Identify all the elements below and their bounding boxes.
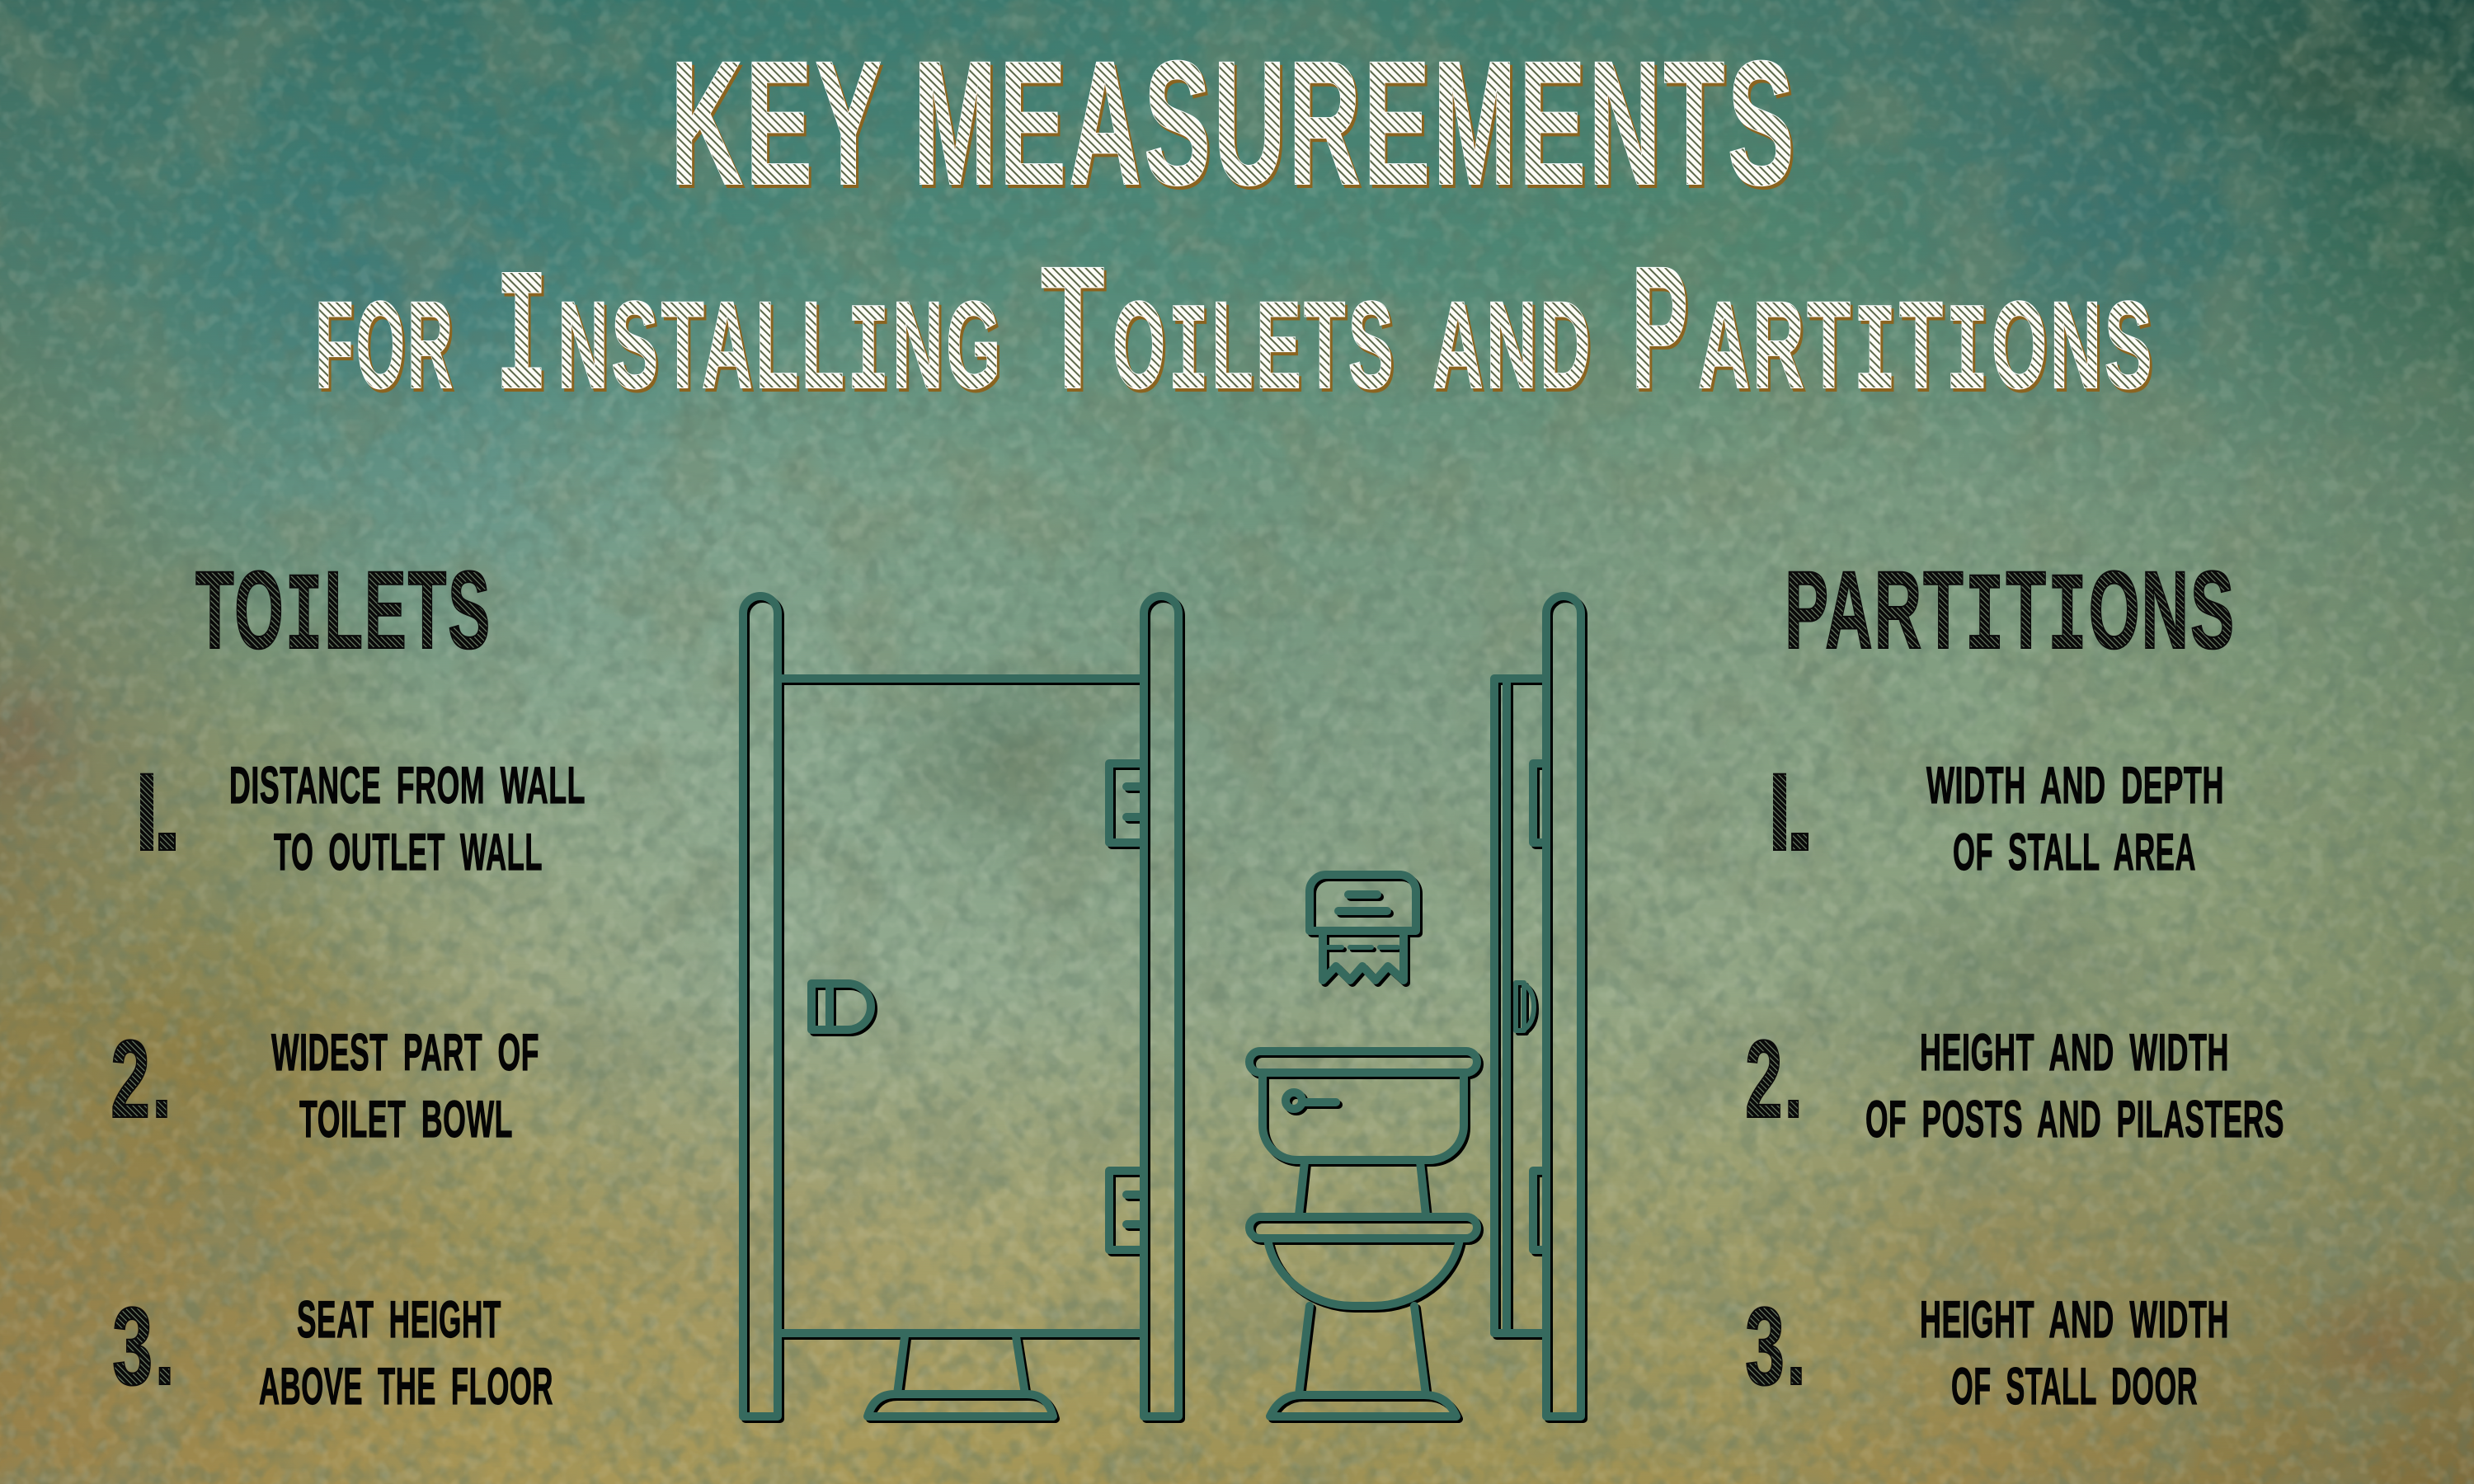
number 1: . xyxy=(1785,751,1818,874)
title line 2: NSTALLING xyxy=(557,275,1004,425)
illustration: stall and toilet xyxy=(743,596,1581,1416)
partition item 3: HEIGHT AND WIDTH xyxy=(1920,1291,2229,1349)
door edge xyxy=(1494,679,1546,1333)
number 2: 2. xyxy=(111,1018,173,1141)
panel: toilets list xyxy=(107,549,586,1416)
panel: partitions list xyxy=(1740,549,2284,1416)
number 1: 1 xyxy=(1740,751,1814,874)
number 2: 2. xyxy=(1745,1018,1804,1141)
lower hinge xyxy=(1109,1171,1144,1250)
stall front view xyxy=(743,596,1178,1416)
upper hinge xyxy=(1109,763,1144,843)
partition item 3: OF STALL DOOR xyxy=(1951,1358,2198,1416)
number 1: . xyxy=(152,751,185,874)
heading: toilets: TOILETS xyxy=(195,549,492,682)
side hinges xyxy=(1533,763,1546,1250)
door latch xyxy=(811,984,871,1030)
tank neck xyxy=(1299,1162,1426,1215)
toilet item 1: DISTANCE FROM WALL xyxy=(229,757,586,815)
title line 2: OILETS xyxy=(1112,275,1396,425)
number 1 xyxy=(1773,773,1808,851)
pilaster foot xyxy=(868,1336,1053,1416)
title line 2: FOR xyxy=(315,275,455,414)
toilet item 1 xyxy=(229,757,586,881)
tank lid xyxy=(1249,1051,1477,1073)
stall side view xyxy=(1494,596,1581,1416)
heading: partitions: PARTITIONS xyxy=(1785,549,2236,682)
partition item 1: WIDTH AND DEPTH xyxy=(1926,757,2224,815)
title line 2 xyxy=(315,230,2155,440)
title line 2: P xyxy=(1631,230,1691,425)
number 1 xyxy=(140,773,176,851)
title line 2: ARTITIONS xyxy=(1698,275,2155,425)
bowl xyxy=(1268,1239,1460,1306)
stall door xyxy=(778,679,1144,1333)
partition item 3 xyxy=(1920,1291,2229,1416)
number 1: 1 xyxy=(107,751,181,874)
flush handle xyxy=(1286,1092,1302,1109)
side post xyxy=(1546,596,1581,1416)
title line 2: T xyxy=(1041,230,1108,425)
toilet item 3: ABOVE THE FLOOR xyxy=(259,1358,553,1416)
toilet item 3 xyxy=(259,1291,553,1416)
toilet item 2: WIDEST PART OF xyxy=(271,1024,539,1082)
partition item 1 xyxy=(1926,757,2224,881)
tank xyxy=(1263,1073,1464,1160)
toilet item 3: SEAT HEIGHT xyxy=(297,1291,501,1349)
title line 2: I xyxy=(496,243,550,440)
number 3: 3. xyxy=(1745,1285,1808,1408)
side latch xyxy=(1516,983,1534,1031)
toilet base xyxy=(1270,1306,1456,1416)
toilet item 2: TOILET BOWL xyxy=(299,1091,513,1148)
title line 2: AND xyxy=(1432,275,1593,414)
number 3: 3. xyxy=(112,1285,176,1408)
toilet item 2 xyxy=(271,1024,539,1148)
right post xyxy=(1144,596,1178,1416)
toilet xyxy=(1249,1051,1477,1416)
toilet paper dispenser xyxy=(1310,875,1416,980)
seat xyxy=(1249,1217,1477,1238)
title xyxy=(315,25,2155,440)
left post xyxy=(743,596,778,1416)
partition item 2 xyxy=(1865,1024,2284,1148)
toilet item 1: TO OUTLET WALL xyxy=(274,824,543,881)
partition item 2: HEIGHT AND WIDTH xyxy=(1920,1024,2229,1082)
partition item 1: OF STALL AREA xyxy=(1953,824,2196,881)
